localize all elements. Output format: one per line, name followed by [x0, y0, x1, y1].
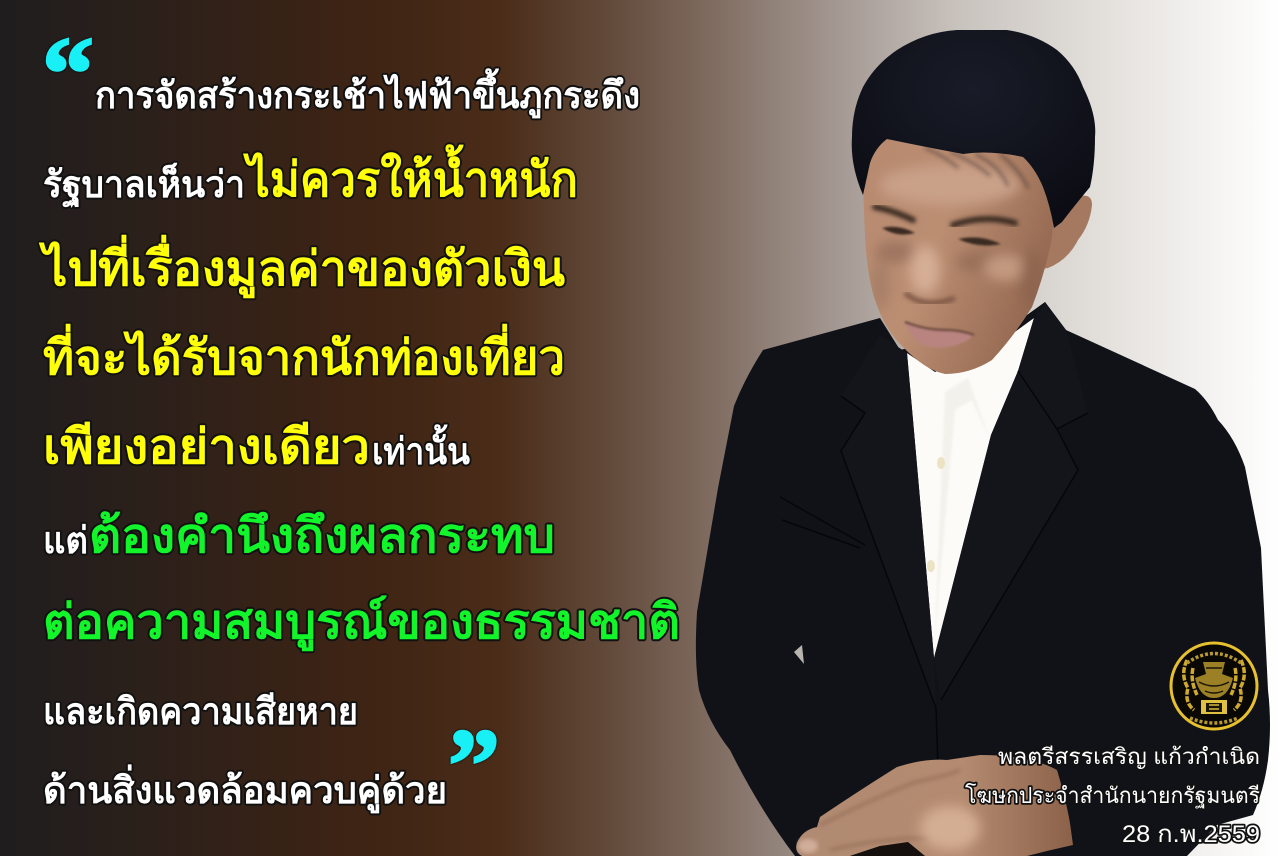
- mouth: [905, 322, 974, 348]
- forehead hair wisps: [925, 148, 1028, 188]
- finger shadows: [820, 770, 960, 850]
- line 8: และเกิดความเสียหาย: [43, 691, 358, 732]
- hand: [796, 755, 1073, 856]
- line 4: ที่จะได้รับจากนักท่องเที่ยว: [43, 323, 565, 385]
- jacket seams: [780, 371, 1088, 856]
- face: [863, 120, 1053, 374]
- left lapel: [841, 335, 936, 708]
- hair: [852, 30, 1095, 228]
- closing quotation mark: ”: [448, 708, 500, 823]
- seal base: [1201, 700, 1227, 714]
- line 7: ต่อความสมบูรณ์ของธรรมชาติ: [43, 595, 680, 652]
- caption title: โฆษกประจำสำนักนายกรัฐมนตรี: [965, 783, 1260, 809]
- caption: spokesperson name, title and date: [965, 744, 1260, 848]
- line 2 white: รัฐบาลเห็นว่า: [43, 161, 245, 208]
- line 1: การจัดสร้างกระเช้าไฟฟ้าขึ้นภูกระดึง: [95, 68, 640, 119]
- shirt buttons: [927, 457, 945, 572]
- eyebrows: [875, 207, 1015, 225]
- line 5 white: เท่านั้น: [372, 424, 470, 472]
- opening quotation mark: “: [42, 16, 94, 131]
- line 2 yellow: ไม่ควรให้น้ำหนัก: [242, 144, 578, 207]
- finger tip highlight: [798, 839, 818, 853]
- jacket: [696, 302, 1270, 856]
- shirt: [907, 318, 1034, 658]
- shirt collar shading: [934, 378, 990, 658]
- line 9: ด้านสิ่งแวดล้อมควบคู่ด้วย: [43, 764, 447, 814]
- face shading: [870, 165, 1044, 310]
- seal of the Prime Minister's Office: [1171, 643, 1257, 729]
- line 6 white: แต่: [43, 520, 88, 561]
- line 5 yellow: เพียงอย่างเดียว: [43, 421, 370, 474]
- photo: man in black suit: [696, 30, 1270, 856]
- line 6 green: ต้องคำนึงถึงผลกระทบ: [89, 510, 555, 563]
- seal urn detail: [1199, 668, 1229, 693]
- nose: [905, 293, 955, 303]
- seal urn: [1195, 662, 1233, 698]
- right lapel: [934, 302, 1088, 700]
- caption name: พลตรีสรรเสริญ แก้วกำเนิด: [998, 744, 1260, 769]
- seal lions: [1184, 660, 1244, 710]
- caption date: 28 ก.พ.2559: [1122, 821, 1260, 848]
- knuckle highlight: [920, 806, 980, 850]
- ear: [1035, 196, 1092, 270]
- seal top arc and bottom band: [1187, 654, 1241, 723]
- background showing through the left arm: [794, 645, 804, 664]
- quote text: [38, 68, 680, 814]
- eyes: [882, 227, 1001, 246]
- finger gap: [850, 842, 925, 856]
- line 3: ไปที่เรื่องมูลค่าของตัวเงิน: [38, 234, 565, 299]
